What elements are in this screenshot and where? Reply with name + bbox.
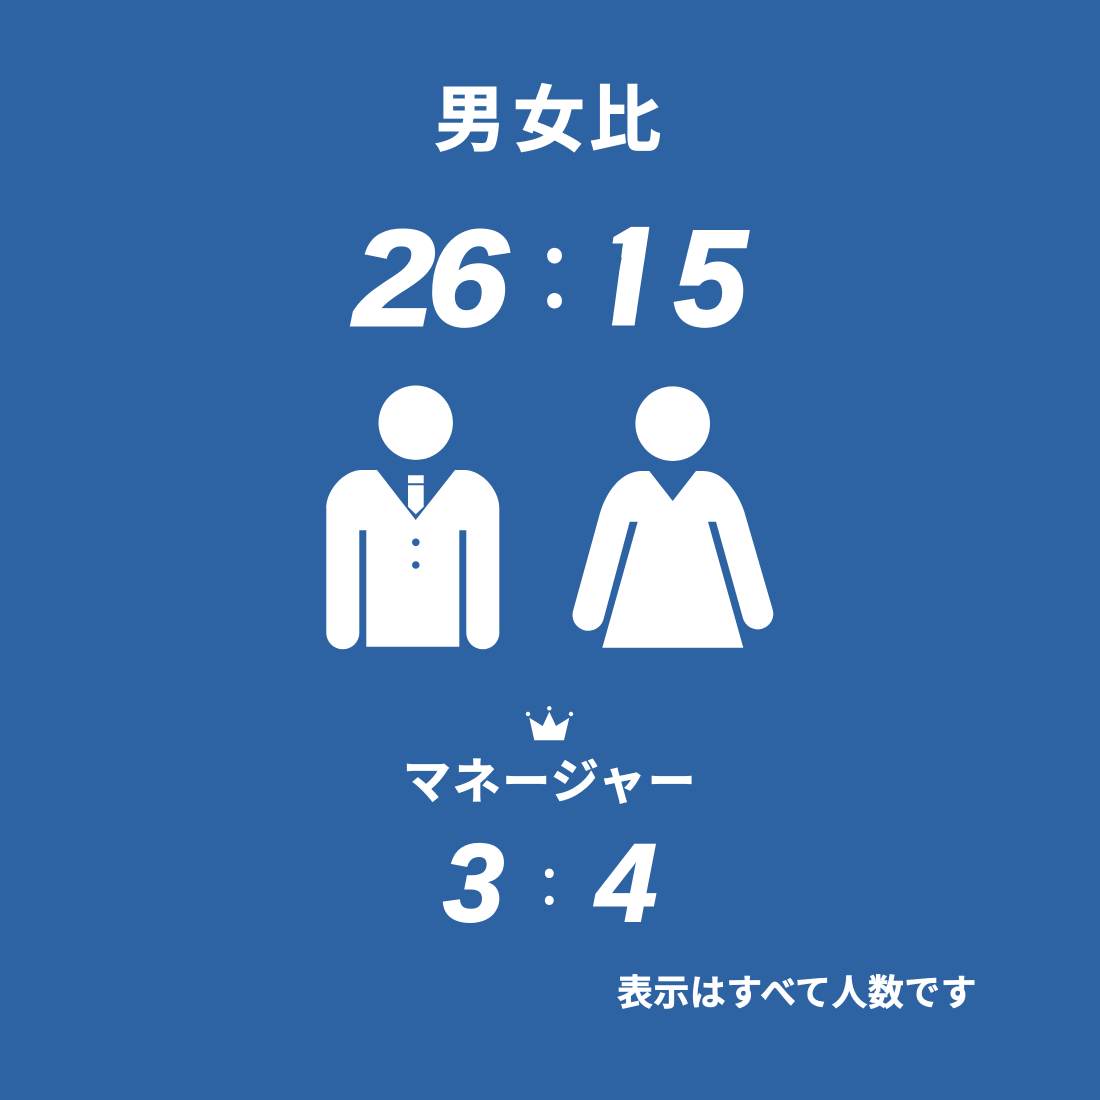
icon: crown: [526, 706, 573, 740]
overall ratio: men 26 to women 15: [350, 226, 750, 328]
manager ratio: 3 to 4: :: [540, 827, 559, 924]
manager heading: マネージャー: [403, 756, 697, 809]
overall ratio: men 26 to women 15: 5: [674, 203, 748, 355]
manager ratio: 3 to 4: 4: [594, 822, 657, 945]
overall ratio: men 26 to women 15: 1: [588, 202, 664, 354]
manager ratio: 3 to 4: 3: [443, 822, 504, 945]
overall ratio: men 26 to women 15: :: [539, 178, 570, 340]
footnote: 表示はすべて人数です: [617, 972, 977, 1013]
icon: woman in dress: [572, 386, 773, 648]
overall ratio: men 26 to women 15: 6: [427, 202, 510, 354]
icon: man in suit: [326, 386, 499, 649]
manager ratio: 3 to 4: [443, 822, 657, 945]
overall ratio: men 26 to women 15: 2: [351, 202, 435, 354]
title: 男女比: [434, 81, 661, 161]
